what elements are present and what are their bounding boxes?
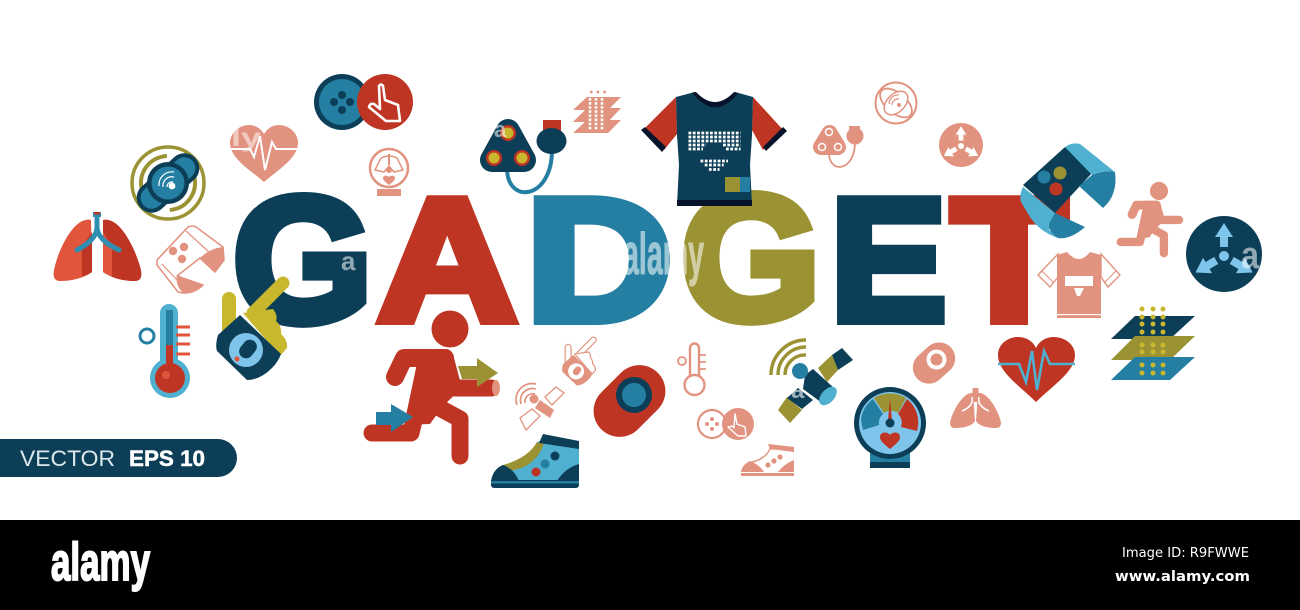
icon: pink mic sensor (818, 126, 864, 167)
badge: vector EPS 10: VECTOR (20, 446, 115, 471)
icon: hand with wearable (216, 283, 287, 380)
icon: pink pill sensor (906, 336, 962, 390)
icon: pink thermometer (678, 344, 706, 395)
footer bar (0, 520, 1300, 610)
watermark: letter on G: a (341, 246, 356, 276)
icon: pink button and touch (698, 408, 754, 440)
arrow: olive right (458, 358, 498, 387)
icon: mic sensor with cable: a (494, 117, 507, 142)
icon: pink running figure (1121, 182, 1179, 253)
icon: pink T-shirt (1038, 252, 1120, 318)
title: GADGET: G (681, 159, 820, 357)
icon: wifi patch in ring (130, 147, 206, 219)
icon: pink gauge (370, 149, 408, 196)
title: GADGET (233, 159, 1067, 359)
icon: pink lungs (950, 388, 1001, 428)
icon: pink satellite (516, 383, 564, 430)
icon: button and touch (314, 74, 413, 130)
icon: satellite (771, 340, 853, 423)
title: GADGET: E (830, 162, 946, 357)
icon: pink layered fabric (573, 92, 621, 133)
icon: pink heart with pulse: ly (231, 122, 262, 152)
icon: red pill sensor (583, 354, 676, 448)
icon: colored wrist band (1020, 143, 1116, 238)
icon: red heart with pulse (998, 337, 1075, 402)
badge: vector EPS 10 (0, 439, 237, 477)
title: GADGET: A (378, 163, 517, 357)
icon: red running figure (372, 310, 500, 456)
footer website: www.alamy.com (1115, 569, 1250, 585)
icon: mic sensor with cable (486, 117, 566, 192)
title: GADGET: G (233, 161, 372, 359)
icon: pink hand with wearable (562, 340, 595, 385)
icon: pink sneaker (741, 444, 794, 476)
icon: smart T-shirt (641, 92, 787, 206)
icon: pink three arrows (939, 123, 983, 167)
icon: heart rate gauge (854, 387, 926, 468)
icon: satellite: a (791, 377, 805, 404)
arrow: blue right (376, 404, 413, 432)
icon: navy three arrows: a (1241, 235, 1260, 277)
icon: thermometer (140, 304, 190, 398)
icon: pink heart with pulse (230, 122, 298, 182)
icon: lungs (54, 212, 141, 281)
icon: smart sneaker (491, 434, 579, 488)
icon: pink wrist band (157, 226, 224, 293)
footer image id: Image ID: R9FWWE (1122, 545, 1249, 561)
icon: navy three arrows (1186, 216, 1262, 292)
icon: pink wifi ring (875, 82, 917, 124)
icon: layered fabric (1111, 306, 1195, 380)
badge: vector EPS 10: EPS 10 (129, 446, 205, 471)
title: GADGET: D (526, 163, 672, 358)
title: GADGET: T (952, 164, 1067, 357)
text: alamy (623, 222, 704, 287)
footer logo: alamy: alamy (51, 533, 150, 592)
